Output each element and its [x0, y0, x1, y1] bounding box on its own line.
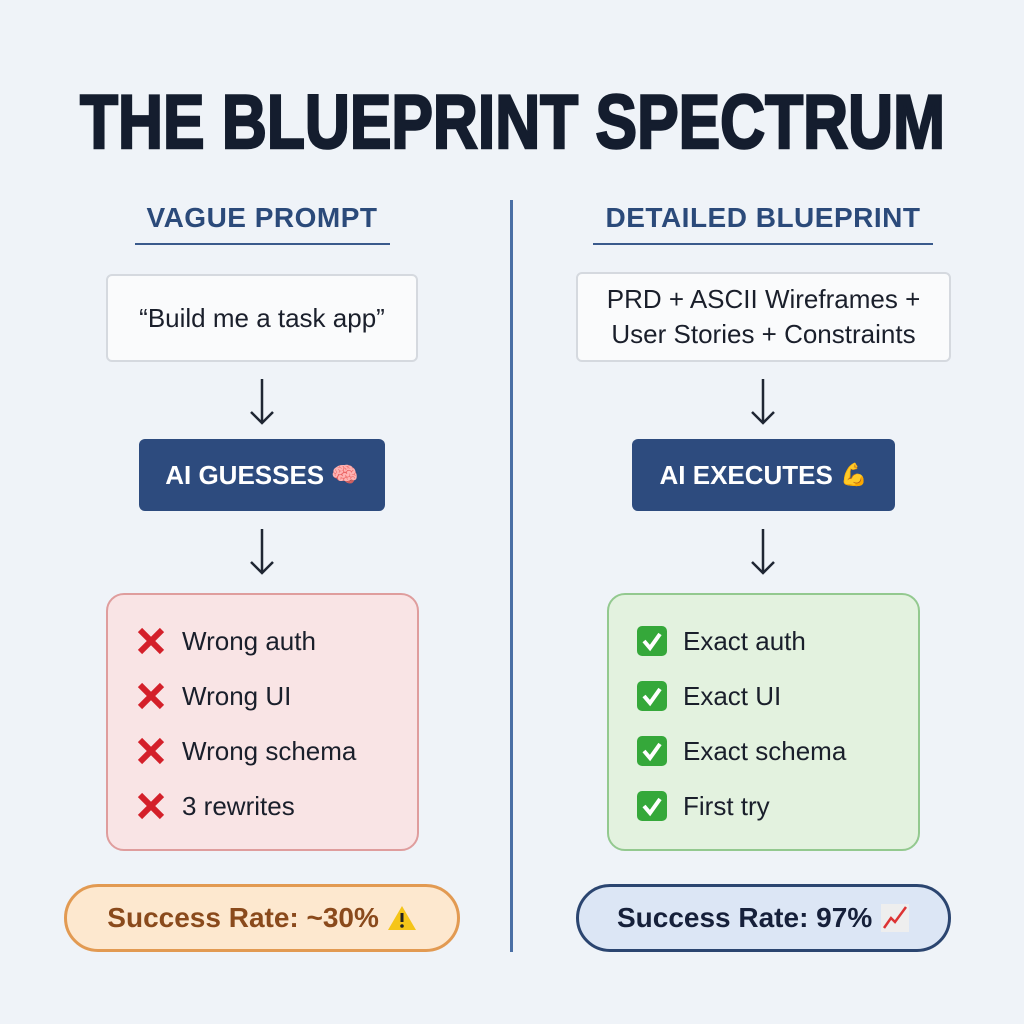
AI executes — [632, 439, 895, 511]
item: Exact auth — [683, 626, 806, 656]
panel: successes — [607, 593, 920, 851]
item — [637, 790, 770, 821]
item — [637, 680, 781, 711]
item: Exact schema — [683, 736, 846, 766]
arrow right 1 — [751, 379, 775, 425]
prompt box: vague — [106, 274, 418, 362]
pill: detailed success rate: Success Rate: 97% — [617, 902, 872, 933]
item: First try — [683, 790, 770, 820]
prompt box: detailed — [576, 272, 951, 362]
pill: detailed success rate — [576, 884, 951, 952]
AI executes: AI EXECUTES — [660, 460, 833, 490]
AI guesses — [139, 439, 385, 511]
AI executes: 💪 — [840, 462, 868, 487]
heading: detailed blueprint: DETAILED BLUEPRINT — [606, 202, 920, 233]
prompt box: detailed: PRD + ASCII Wireframes + — [607, 284, 920, 314]
item: Wrong auth — [182, 626, 316, 656]
pill: vague success rate — [64, 884, 460, 952]
arrow left 1 — [250, 379, 274, 425]
item: Wrong UI — [182, 680, 291, 710]
arrow left 2 — [250, 529, 274, 575]
pill: vague success rate: Success Rate: ~30% — [107, 902, 379, 933]
item: 3 rewrites — [182, 790, 295, 820]
heading: vague prompt: VAGUE PROMPT — [146, 202, 378, 233]
prompt box: detailed: User Stories + Constraints — [611, 319, 916, 349]
prompt box: vague: “Build me a task app” — [139, 302, 385, 332]
AI guesses: 🧠 — [331, 462, 359, 487]
AI guesses: AI GUESSES — [165, 460, 324, 490]
item: Exact UI — [683, 680, 781, 710]
panel: failures — [106, 593, 419, 851]
item: Wrong schema — [182, 736, 356, 766]
divider — [510, 200, 513, 952]
arrow right 2 — [751, 529, 775, 575]
